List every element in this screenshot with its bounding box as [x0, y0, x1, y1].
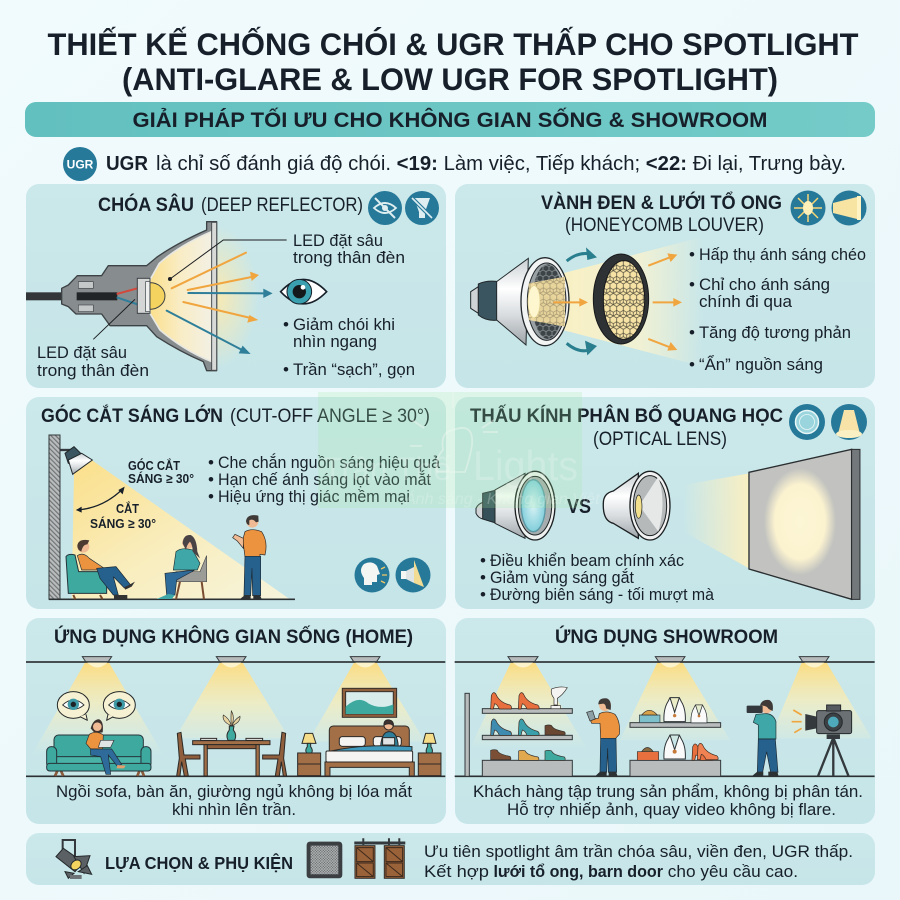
heading: home application: ỨNG DỤNG KHÔNG GIAN SỐNG (HOME) [54, 624, 413, 648]
bullet list: cut-off angle: Che chắn nguồn sáng hiệu quả [218, 453, 441, 472]
title [48, 26, 858, 97]
angle labels: SÁNG ≥ 30° [90, 516, 156, 531]
camera on tripod [792, 705, 852, 776]
angle labels: CẮT [116, 501, 139, 516]
angle labels [90, 458, 194, 531]
heading: optical lens: THẤU KÍNH PHÂN BỐ QUANG HỌC [470, 405, 783, 427]
bullet list: honeycomb louver: Hấp thụ ánh sáng chéo [699, 245, 866, 264]
angle labels: SÁNG ≥ 30° [128, 471, 194, 486]
bullet list: honeycomb louver: chính đi qua [699, 292, 793, 311]
heading: cut-off angle: GÓC CẮT SÁNG LỚN [41, 405, 223, 427]
panel: deep reflector [26, 184, 446, 388]
UGR definition line [63, 147, 846, 181]
recommendation text: Ưu tiên spotlight âm trần chóa sâu, viền đen, UGR thấp. [424, 842, 853, 861]
shoe shelves [465, 687, 572, 776]
bullet list: cut-off angle: Hiệu ứng thị giác mềm mại [218, 487, 410, 506]
icon: no direct light [405, 191, 439, 225]
panel: showroom application [455, 618, 875, 824]
bullet list: optical lens: Đường biên sáng - tối mượt mà [490, 585, 715, 604]
caption: home: Ngồi sofa, bàn ăn, giường ngủ không bị lóa mắt [56, 782, 412, 801]
dining table [177, 711, 287, 776]
bullet list: cut-off angle: • [208, 487, 214, 506]
bullet list: honeycomb louver: • [689, 245, 695, 264]
UGR definition line: UGR [106, 153, 149, 175]
panel: optical lens [455, 397, 875, 609]
caption: home [56, 782, 412, 819]
heading: options and accessories: LỰA CHỌN & PHỤ KIỆN [105, 852, 293, 873]
angle labels: GÓC CẮT [128, 458, 180, 473]
caption: showroom: Hỗ trợ nhiếp ảnh, quay video không bị flare. [507, 800, 836, 819]
UGR definition line: là chỉ số đánh giá độ chói. <19: Làm việc, Tiếp khách; <22: Đi lại, Trưng bày. [156, 153, 843, 175]
bullet list: optical lens [480, 551, 715, 604]
sofa [47, 735, 151, 776]
bullet list: honeycomb louver [689, 245, 866, 374]
caption: showroom [473, 782, 863, 819]
icon: glare burst [790, 190, 826, 226]
icon: honeycomb mesh [307, 842, 342, 878]
icon: UGR badge [63, 147, 97, 181]
illustration: wall lamp and people [49, 435, 295, 599]
watermark: Trần Thế [323, 451, 451, 487]
bullet list: optical lens: • [480, 568, 486, 587]
heading: honeycomb louver: VÀNH ĐEN & LƯỚI TỔ ONG [541, 192, 782, 214]
heading: showroom application: ỨNG DỤNG SHOWROOM [555, 624, 778, 648]
heading: optical lens [470, 405, 783, 450]
heading: cut-off angle: (CUT-OFF ANGLE ≥ 30°) [230, 406, 430, 427]
bedroom furniture [298, 720, 441, 776]
icon: lens [789, 404, 825, 440]
bullet list: optical lens: Điều khiển beam chính xác [490, 551, 684, 570]
caption: showroom: Khách hàng tập trung sản phẩm, không bị phân tán. [473, 782, 863, 801]
illustration: deep reflector lamp [26, 222, 287, 371]
icon: light beam [832, 190, 866, 226]
icon: no glare eye [368, 191, 402, 225]
bullet list: optical lens: • [480, 585, 486, 604]
title: (ANTI-GLARE & LOW UGR FOR SPOTLIGHT) [122, 61, 778, 97]
bullet list: cut-off angle: • [208, 470, 214, 489]
watermark: Ánh sáng - Không gian Việt [404, 489, 600, 508]
bullet list: cut-off angle [208, 453, 441, 506]
labels: deep reflector: Giảm chói khi [293, 315, 395, 334]
panel: cut-off angle [26, 397, 446, 609]
painting [342, 688, 397, 717]
photographer [747, 700, 779, 776]
labels: deep reflector: nhìn ngang [293, 332, 377, 351]
icon: eye [281, 279, 327, 304]
bullet list: honeycomb louver: • [689, 275, 695, 294]
labels: deep reflector: trong thân đèn [293, 248, 405, 267]
bullet list: cut-off angle: Hạn chế ánh sáng lọt vào mắt [218, 470, 431, 489]
person on sofa [86, 719, 126, 774]
bullet list: honeycomb louver: • [689, 355, 695, 374]
panel: home application [26, 618, 446, 824]
subtitle banner [25, 102, 875, 137]
illustration: showroom scene [455, 657, 875, 776]
bullet list: honeycomb louver: Chỉ cho ánh sáng [699, 275, 830, 294]
bullet list: optical lens: • [480, 551, 486, 570]
bullet list: honeycomb louver: • [689, 323, 695, 342]
labels: deep reflector [37, 231, 415, 380]
subtitle banner: GIẢI PHÁP TỐI ƯU CHO KHÔNG GIAN SỐNG & SHOWROOM [132, 108, 768, 132]
icon: stage spotlight [56, 840, 92, 879]
recommendation text: cho yêu cầu cao. [663, 862, 798, 881]
icon: soft beam [831, 404, 867, 440]
customer with phone [587, 698, 620, 776]
illustration: lens lamp versus plain lamp [476, 449, 860, 599]
icon: barn doors [354, 838, 405, 878]
icon: UGR badge: UGR [67, 158, 94, 172]
recommendation text: Kết hợp [424, 862, 489, 881]
labels: deep reflector: LED đặt sâu [37, 343, 127, 362]
heading: optical lens: (OPTICAL LENS) [593, 429, 727, 450]
icon: speaking head [354, 558, 390, 592]
label: VS: VS [567, 496, 591, 518]
bullet list: optical lens: Giảm vùng sáng gắt [490, 568, 634, 587]
icon: eyes in speech bubbles [57, 692, 135, 720]
bullet list: cut-off angle: • [208, 453, 214, 472]
labels: deep reflector: LED đặt sâu [293, 231, 383, 250]
labels: deep reflector: • [283, 315, 289, 334]
panel: honeycomb louver [455, 184, 875, 388]
heading: honeycomb louver [541, 192, 782, 236]
recommendation text [424, 842, 853, 881]
heading: honeycomb louver: (HONEYCOMB LOUVER) [565, 215, 764, 236]
labels: deep reflector: • [283, 360, 289, 379]
watermark [318, 392, 600, 508]
recommendation text: lưới tổ ong, barn door [489, 862, 663, 881]
labels: deep reflector: Trần “sạch”, gọn [293, 360, 415, 379]
watermark: Lights [473, 442, 578, 489]
bullet list: honeycomb louver: “Ẩn” nguồn sáng [699, 355, 823, 374]
bullet list: honeycomb louver: Tăng độ tương phản [699, 323, 851, 342]
title: THIẾT KẾ CHỐNG CHÓI & UGR THẤP CHO SPOTLIGHT [48, 26, 858, 62]
jewellery shelves [630, 698, 721, 776]
illustration: home scene [26, 657, 445, 776]
heading: deep reflector: CHÓA SÂU [98, 194, 194, 216]
icon: megaphone light [396, 558, 430, 592]
heading: deep reflector: (DEEP REFLECTOR) [201, 195, 363, 216]
illustration: lamp and honeycomb louver [471, 237, 703, 367]
panel: options and accessories [26, 833, 875, 885]
labels: deep reflector: trong thân đèn [37, 361, 149, 380]
caption: home: khi nhìn lên trần. [172, 800, 296, 819]
